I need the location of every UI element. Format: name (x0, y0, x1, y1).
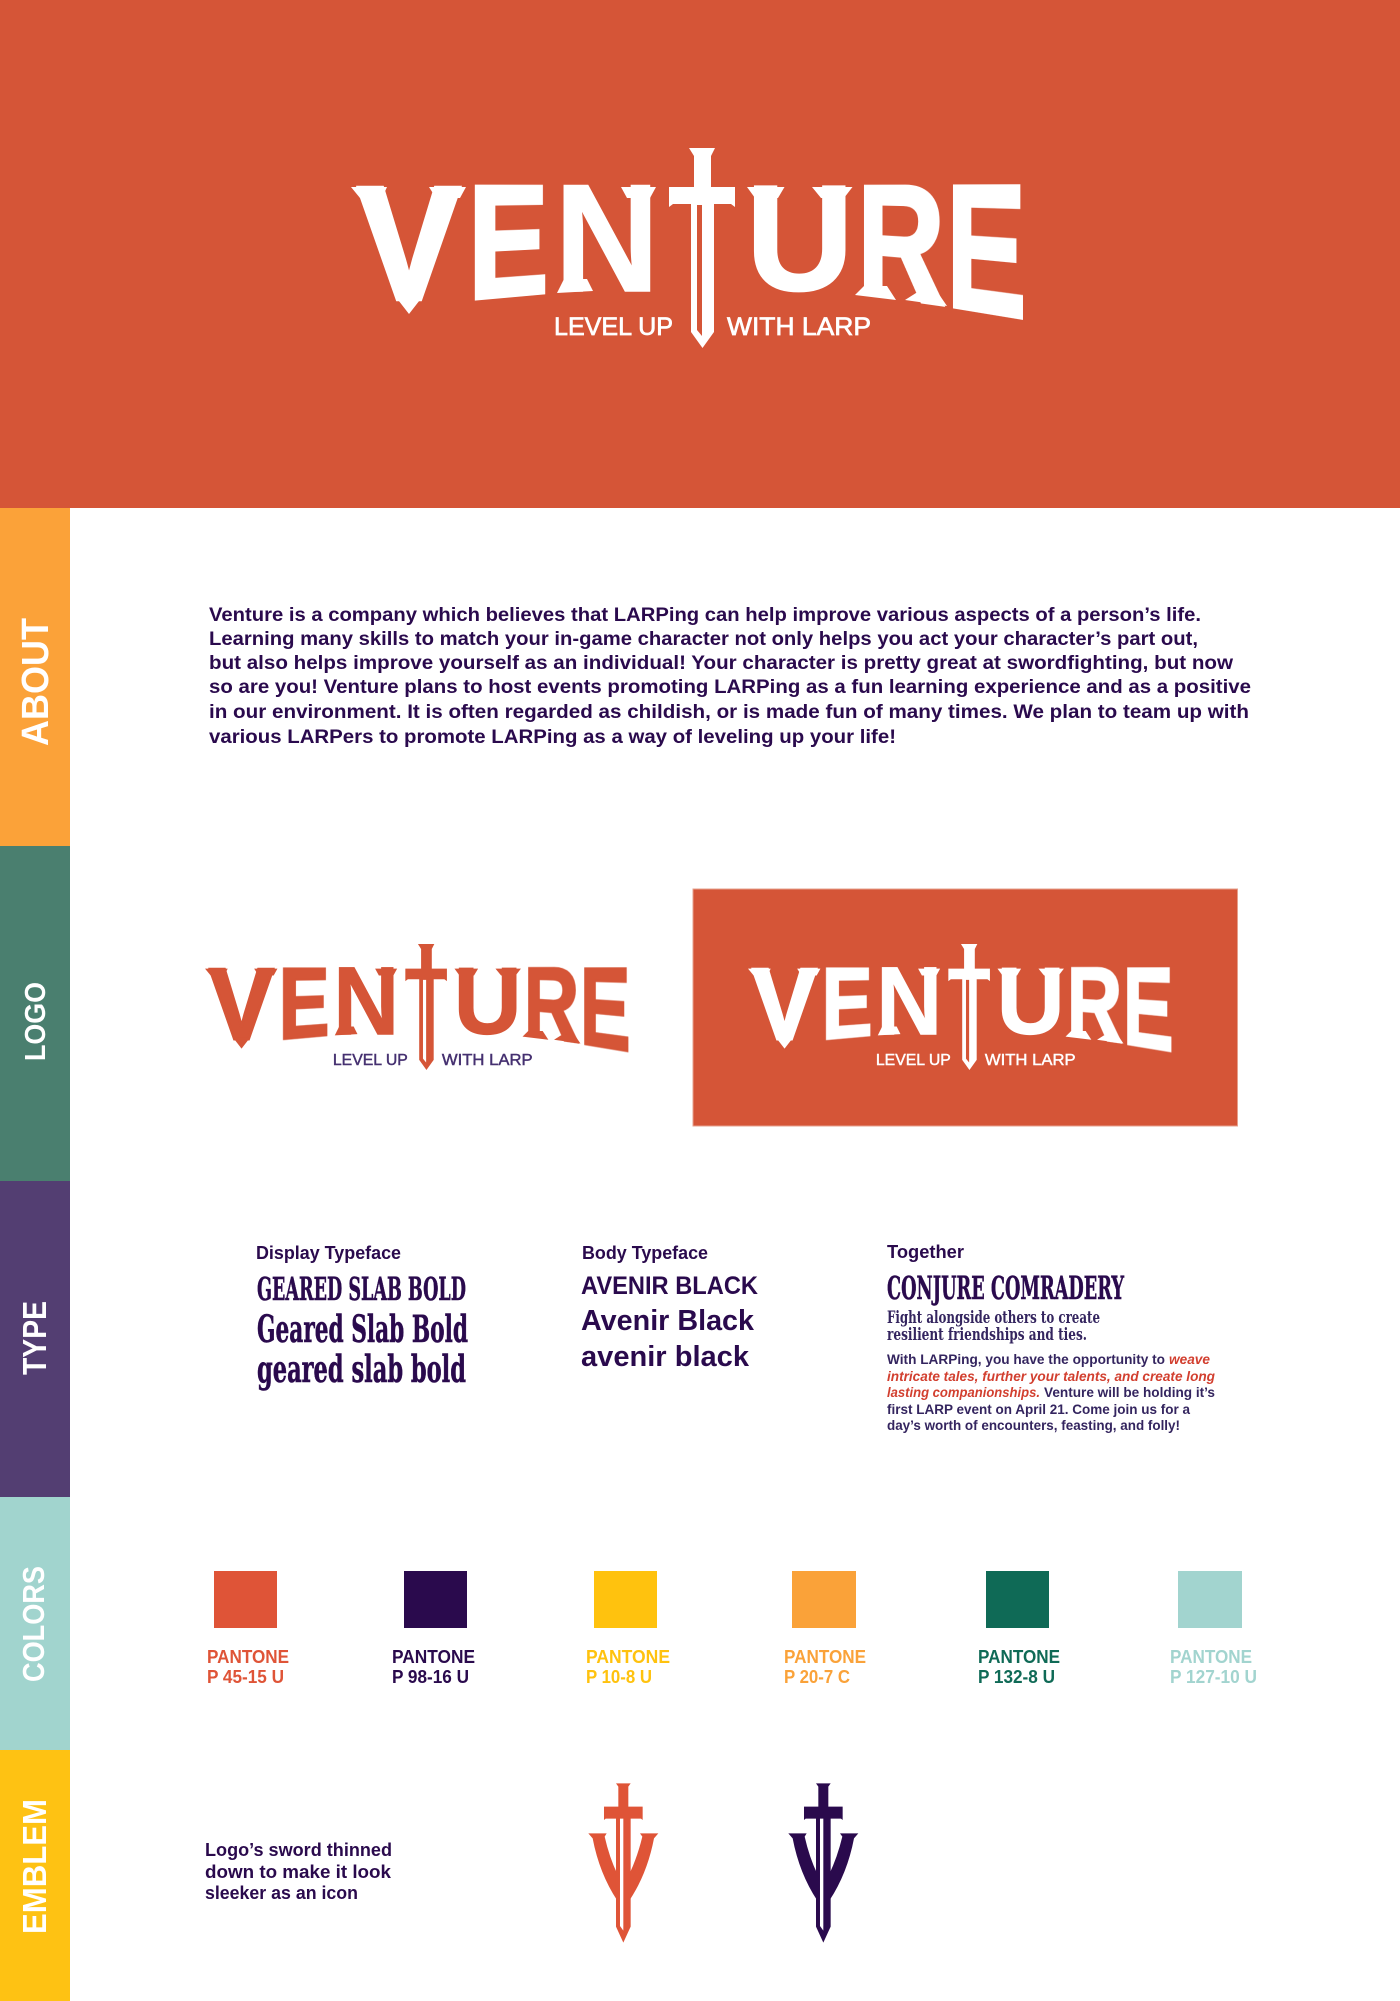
about paragraph: Venture is a company which believes that LARPing can help improve various aspects of a person’s life. (209, 604, 1201, 626)
logo: orange on white: E (278, 946, 330, 1062)
emblem note: sleeker as an icon (205, 1883, 358, 1903)
display typeface specimen: GEARED SLAB BOLD (257, 1271, 466, 1308)
about paragraph: in our environment. It is often regarded as childish, or is made fun of many times. We plan to team up with (209, 701, 1249, 723)
icon: emblem purple (788, 1783, 858, 1943)
logo: white on orange (748, 942, 1174, 1078)
emblem note: down to make it look (205, 1862, 392, 1882)
tab: about (0, 508, 70, 846)
logo panel background (693, 889, 1238, 1126)
logo: white on orange: E (1123, 942, 1174, 1078)
body typeface specimen: avenir black (581, 1341, 750, 1373)
colour swatch: 98-16 U: P 98-16 U (392, 1667, 469, 1687)
emblem note: Logo’s sword thinned (205, 1840, 392, 1860)
tab: emblem (0, 1750, 70, 2001)
logo: white on orange: V (752, 948, 817, 1061)
logo: orange on white: R (524, 945, 579, 1066)
tab: type (0, 1181, 70, 1497)
tab: colors: COLORS (16, 1566, 51, 1682)
about paragraph: so are you! Venture plans to host events promoting LARPing as a fun learning experience and as a positive (209, 676, 1251, 698)
colour swatch: 98-16 U (392, 1571, 475, 1687)
logo: hero white: V (358, 154, 460, 333)
colour swatch: 127-10 U: PANTONE (1170, 1647, 1252, 1667)
logo: orange on white: E (580, 942, 631, 1078)
colour swatch: 127-10 U (1170, 1571, 1257, 1687)
logo: orange on white: V (209, 948, 274, 1061)
emblem note (205, 1840, 392, 1903)
typefaces together sample: With LARPing, you have the opportunity to (887, 1352, 1165, 1367)
body typeface specimen: Avenir Black (581, 1305, 755, 1337)
about paragraph: Learning many skills to match your in-game character not only helps you act your character’s part out, (209, 628, 1198, 650)
tab: emblem: EMBLEM (16, 1799, 53, 1934)
colour swatch: 98-16 U: PANTONE (392, 1647, 475, 1667)
typefaces together sample (887, 1242, 1216, 1433)
logo: hero white: R (857, 149, 945, 342)
logo: white on orange: R (1067, 945, 1122, 1066)
colour swatch: 20-7 C: P 20-7 C (784, 1667, 850, 1687)
typefaces together sample: day’s worth of encounters, feasting, and folly! (887, 1418, 1180, 1433)
tab: colors (0, 1497, 70, 1750)
logo: white on orange: WITH LARP (985, 1052, 1076, 1069)
about paragraph: various LARPers to promote LARPing as a way of leveling up your life! (209, 726, 896, 748)
tab: about: ABOUT (15, 618, 57, 746)
display typeface specimen: geared slab bold (257, 1347, 466, 1391)
body typeface specimen: AVENIR BLACK (581, 1272, 758, 1300)
logo: hero white: WITH LARP (727, 313, 871, 341)
colour swatch: 45-15 U: PANTONE (207, 1647, 289, 1667)
about paragraph: but also helps improve yourself as an individual! Your character is pretty great at swordfighting, but now (209, 652, 1234, 674)
logo: hero white: N (554, 152, 660, 324)
logo: orange on white: LEVEL UP (333, 1052, 408, 1069)
tab: logo (0, 846, 70, 1181)
logo: orange on white: WITH LARP (442, 1052, 533, 1069)
typefaces together sample: lasting companionships. (887, 1385, 1040, 1400)
typefaces together sample: Venture will be holding it’s (1044, 1385, 1215, 1400)
about paragraph (209, 604, 1251, 748)
logo: orange on white (205, 942, 631, 1078)
logo: hero white: U (746, 154, 854, 322)
colour swatch: 10-8 U (586, 1571, 670, 1687)
colour swatch: 132-8 U: P 132-8 U (978, 1667, 1055, 1687)
body typeface specimen: Body Typeface (582, 1243, 708, 1263)
colour swatch: 132-8 U (978, 1571, 1060, 1687)
section sidebar (0, 508, 70, 2001)
logo: white on orange: U (997, 948, 1065, 1054)
logo: hero white: E (947, 145, 1027, 360)
colour swatch: 20-7 C: PANTONE (784, 1647, 866, 1667)
colour swatch: 127-10 U: P 127-10 U (1170, 1667, 1257, 1687)
logo: orange on white: N (333, 947, 399, 1055)
typefaces together sample: CONJURE COMRADERY (887, 1270, 1124, 1307)
display typeface specimen: Geared Slab Bold (257, 1307, 468, 1351)
body typeface specimen (581, 1243, 758, 1373)
typefaces together sample: resilient friendships and ties. (887, 1325, 1087, 1344)
typefaces together sample: Together (887, 1242, 964, 1262)
typefaces together sample: first LARP event on April 21. Come join us for a (887, 1402, 1190, 1417)
logo: hero white: LEVEL UP (554, 313, 673, 341)
colour swatch: 45-15 U: P 45-15 U (207, 1667, 284, 1687)
tab: logo: LOGO (20, 982, 52, 1061)
display typeface specimen (256, 1243, 468, 1391)
typefaces together sample: weave (1169, 1352, 1210, 1367)
hero banner (0, 0, 1400, 508)
colour swatch: 45-15 U (207, 1571, 289, 1687)
logo: hero white (351, 145, 1027, 360)
tab: type: TYPE (16, 1301, 53, 1375)
icon: emblem orange (588, 1783, 658, 1943)
logo: hero white: E (467, 151, 549, 335)
colour swatch: 132-8 U: PANTONE (978, 1647, 1060, 1667)
typefaces together sample: intricate tales, further your talents, and create long (887, 1369, 1216, 1384)
colour swatch: 10-8 U: PANTONE (586, 1647, 670, 1667)
logo: white on orange: LEVEL UP (876, 1052, 951, 1069)
colour swatch: 10-8 U: P 10-8 U (586, 1667, 652, 1687)
typefaces together sample: Fight alongside others to create (887, 1308, 1100, 1327)
display typeface specimen: Display Typeface (256, 1243, 401, 1263)
logo: orange on white: U (454, 948, 522, 1054)
colour swatch: 20-7 C (784, 1571, 866, 1687)
logo: white on orange: N (876, 947, 942, 1055)
logo: white on orange: E (821, 946, 873, 1062)
